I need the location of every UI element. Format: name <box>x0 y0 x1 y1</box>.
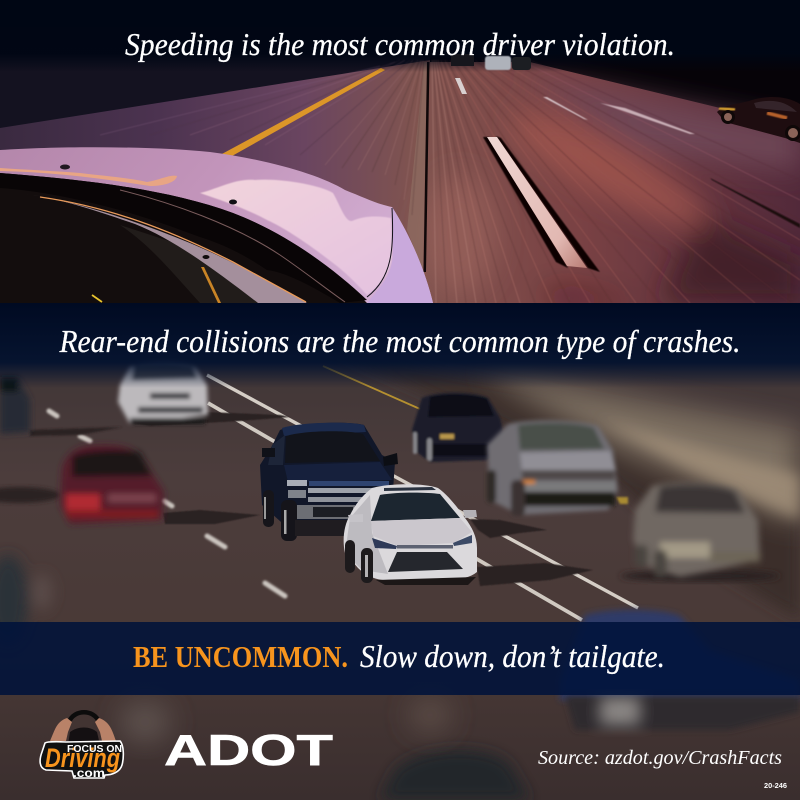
source credit: Source: azdot.gov/CrashFacts <box>538 747 782 769</box>
call to action: be uncommon: BE UNCOMMON. <box>133 639 348 674</box>
heading: rear-end collisions: Rear-end collisions are the most common type of crashes. <box>59 323 741 359</box>
white sedan, front <box>344 484 477 585</box>
logo: Focus on Driving <box>40 712 123 780</box>
car hood and windshield <box>0 147 433 303</box>
motion streaks on the road <box>100 60 800 303</box>
dark sedan, centre back <box>412 393 505 462</box>
heading: speeding: Speeding is the most common driver violation. <box>125 26 675 62</box>
blurred car body under the band <box>565 696 800 730</box>
silver sedan, back left <box>118 362 208 424</box>
call to action: slow down: Slow down, don’t tailgate. <box>360 638 665 674</box>
logo: ADOT: ADOT <box>164 726 333 775</box>
document code: 20-246 <box>764 783 787 790</box>
icon: steering wheel and hands <box>50 712 116 745</box>
logo badge <box>40 741 123 778</box>
call-to-action band <box>0 622 800 695</box>
dark band behind first heading <box>0 0 800 72</box>
logo wordmark driving: Driving <box>45 743 120 773</box>
car shadows <box>0 412 780 586</box>
red car <box>60 445 164 524</box>
distant traffic <box>451 54 531 70</box>
lane lines <box>49 366 638 620</box>
blurred left foreground car <box>0 552 52 622</box>
photo: traffic on highway <box>0 303 800 800</box>
dark car, far left <box>0 377 30 434</box>
blue pickup truck <box>260 423 398 541</box>
blurred shoulder <box>409 373 800 614</box>
blurred dark car, bottom <box>380 750 530 800</box>
photo: speeding highway from car <box>0 0 800 303</box>
silver pickup <box>487 420 618 516</box>
blurred road glow <box>120 699 450 742</box>
blurred blue car, foreground <box>560 610 800 700</box>
lane markings <box>220 62 800 272</box>
logo wordmark top: FOCUS ON <box>67 743 122 755</box>
logo wordmark .com: .com <box>73 766 105 780</box>
dark band behind second heading <box>0 303 800 388</box>
road light and shade patches <box>424 75 800 303</box>
car on the right of the road <box>717 97 800 143</box>
tan sedan, right <box>633 483 760 577</box>
